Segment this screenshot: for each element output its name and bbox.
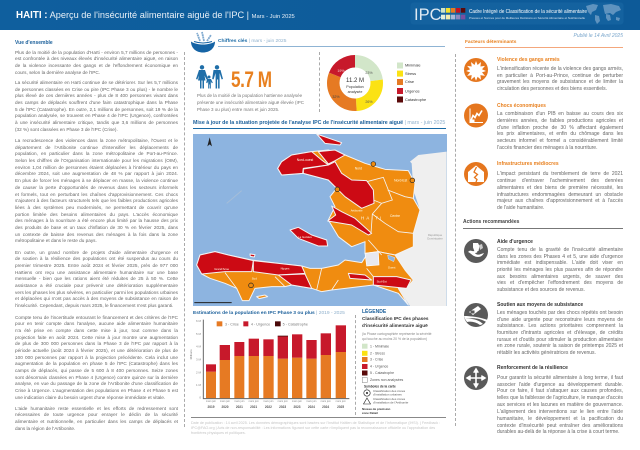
text: resilience: [497, 375, 623, 435]
text: resilience: humanitaire, le développement et la pacification du: [497, 416, 623, 422]
donut legend: Crise: [405, 79, 414, 84]
overview paragraph 3: environ 1,04 million de personnes étaient déplacées à l'intérieur du pays en: [15, 165, 178, 170]
region labels: HAITI: [361, 216, 384, 221]
legend note: qui touche au moins 20 % de la population): [362, 337, 427, 341]
overview paragraph 2: population analysée, se trouvent en Phase 4 de l'IPC (Urgence), confrontées: [15, 113, 178, 118]
bar chart: population in IPC Phase 3+: Millions: [189, 349, 193, 359]
bar chart: population in IPC Phase 3+: 0: [199, 396, 201, 400]
donut chart: population analysée: Population: [346, 85, 364, 89]
north arrow: [207, 137, 212, 146]
text: resilience: Pour ce faire, il faut s'attaquer aux causes profondes,: [497, 388, 623, 394]
overview paragraph 3: population, en particulier dans la zone métropolitaine de Port-au-Prince.: [15, 151, 178, 156]
heading: economic shocks: Chocs économiques: [497, 103, 546, 109]
overview paragraph 4: Haïtiens ont reçu une assistance alimentaire humanitaire sur une base: [15, 270, 178, 275]
overview paragraph 4: premier trimestre 2025. Entre août 2024 et février 2025, près de 977 000: [15, 263, 178, 268]
overview paragraph 5: pour en tenir compte dans l'analyse, aucune aide alimentaire humanitaire: [15, 321, 178, 326]
text: economic shocks: l'accès financier des ménages à la nourriture.: [497, 145, 597, 151]
donut chart: population analysée: 19%: [337, 69, 345, 73]
overview paragraph 2: [15, 80, 178, 132]
bar chart: population in IPC Phase 3+: 2020: [221, 405, 229, 409]
overview paragraph 6: nécessaires de toute urgence pour enrayer le déclin de la sécurité: [15, 412, 178, 417]
Port-au-Prince area: [365, 252, 379, 266]
overview paragraph 3: et formels, tout en perturbant les chaînes d'approvisionnement. Ces chocs: [15, 192, 178, 196]
title: HAITI : Aperçu de l'insécurité alimentaire aiguë de l'IPC | Mars - Juin 2025: [16, 10, 295, 21]
text: livelihood support: en zone rurale, soutenir la saison de printemps 2025 et: [497, 343, 623, 349]
overview paragraph 3: En plus de forcer les ménages à se déplacer en masse, la violence continue: [15, 178, 178, 183]
text: resilience: durables au-delà de la réponse à la crise à court terme.: [497, 429, 620, 435]
overview paragraph 6: alimentaire et nutritionnelle, en particulier dans les camps de déplacés et: [15, 419, 178, 424]
text: livelihood support: d'une aide urgente pour reconstruire leurs moyens de: [497, 317, 623, 323]
overview paragraph 5: 100 000 personnes par rapport à la projection précédente. Cela inclut une: [15, 355, 178, 360]
icon: family: [196, 65, 223, 88]
IPC logo: IPC: [414, 6, 442, 24]
bar chart: population in IPC Phase 3+: 2023: [293, 405, 301, 409]
legend swatches: d'installation de l'Artibonite: [373, 400, 409, 404]
bar chart: population in IPC Phase 3+: 5 M: [196, 332, 201, 336]
bar chart: population in IPC Phase 3+: 2021: [236, 405, 243, 409]
bar chart: population in IPC Phase 3+: mars juin: [220, 400, 231, 403]
text: violence: en particulier à Port-au-Prince, continue de perturber: [497, 73, 623, 79]
overview paragraph 3: Selon les chiffres de l'Organisation internationale pour les migrations (OIM),: [15, 158, 178, 163]
heading: resilience: Renforcement de la résilience: [497, 365, 568, 371]
overview paragraph 5: de plus de 300 000 personnes dans la Phase 3 de l'IPC par rapport à la: [15, 341, 178, 346]
heading: Vue d'ensemble: Vue d'ensemble: [15, 40, 53, 46]
heading: infrastructure: Infrastructures médiocres: [497, 161, 559, 167]
region labels: Sud: [252, 276, 257, 280]
legend note: (la Phase cartographiée représente la sévérité: [362, 332, 432, 336]
text: livelihood support: rétablir les activités génératrices de revenus.: [497, 350, 596, 356]
legend swatches: Symboles de la carte: [364, 384, 396, 388]
heading: chart title: Estimations de la population en IPC Phase 3 ou plus | 2019 - 2025: [193, 310, 345, 316]
overview paragraph 5: Compte tenu de l'incertitude entourant le financement et des critères de l'IPC: [15, 314, 178, 320]
overview paragraph 3: des produits de base et un taux d'inflation de 30 % en février 2025, dans: [15, 225, 178, 230]
chart legend: 3 - Crise: [225, 322, 239, 326]
overview paragraph 1: est confrontée à des niveaux élevés d'insécurité alimentaire aiguë, en raison: [15, 56, 178, 61]
donut legend: [397, 62, 426, 102]
bar chart: population in IPC Phase 3+: 2 M: [196, 370, 201, 374]
publication date: Publié le 14 Avril 2025: [574, 33, 623, 39]
overview paragraph 3: un contexte de baisse des revenus des ménages à la fois dans la zone: [15, 232, 178, 237]
legend swatches: 5 - Catastrophe: [370, 371, 394, 375]
chart legend: 5 - Catastrophe: [283, 322, 308, 326]
donut legend: Catastrophe: [405, 97, 426, 102]
icon: livelihood support: [464, 303, 488, 327]
donut chart: population analysée: [327, 55, 383, 111]
bar chart: population in IPC Phase 3+: 2022: [265, 405, 272, 409]
bar chart: population in IPC Phase 3+: 2023: [279, 405, 286, 409]
overview paragraph 3: liées à des systèmes peu modernisés, ne permettant de couvrir qu'une: [15, 205, 178, 210]
donut chart: population analysée: analysée: [348, 90, 362, 94]
overview paragraph 6: L'aide humanitaire reste essentielle et les efforts de redressement sont: [15, 406, 178, 410]
legend subtitle: [362, 316, 428, 328]
text: livelihood support: subsistance. Les actions prioritaires comprennent la: [497, 323, 623, 329]
bar chart: population in IPC Phase 3+: [189, 319, 350, 409]
heading: emergency aid: Aide d'urgence: [497, 239, 533, 245]
text: emergency aid: priorité les ménages les plus pauvres afin de répondre: [497, 267, 623, 273]
footnote: IPC@FAO.org | Avis de non-responsabilité : Les informations figurant sur cette carte n'impliquent pas la reconnaissance officielle ou l'approbation des: [191, 426, 435, 430]
overview paragraph 5: [15, 314, 178, 400]
text: infrastructure: majeur aux chaînes d'approvisionnement et à l'accès: [497, 198, 623, 204]
text: resilience: telles que la faiblesse de l'agriculture, le manque d'accès: [497, 395, 623, 401]
orange base land: [197, 150, 420, 305]
icon: wheat bowl: [191, 32, 215, 52]
text: emergency aid: dans les zones des Phases 4 et 5, une aide d'urgence: [497, 254, 623, 260]
overview paragraph 4: et déplacées qui n'ont pas accès à des moyens de subsistance en raison de: [15, 296, 178, 301]
overview paragraph 5: analyse, en vue du passage de la zone de l'Artibonite d'une classification de: [15, 381, 178, 386]
text: resilience: contexte d'insécurité peut entraîner des améliorations: [497, 423, 623, 429]
text: economic shocks: La combinaison d'un PIB en baisse au cours des six: [497, 111, 623, 117]
overview paragraph 2: (32 %) sont classées en Phase 3 de l'IPC (Crise).: [15, 127, 118, 132]
region labels: Nord-ouest: [297, 158, 313, 162]
overview paragraph 6: [15, 406, 178, 431]
overview paragraph 3: portion limitée des besoins alimentaires du pays. L'accès économique: [15, 212, 178, 217]
text: livelihood support: ruraux et d'outils pour stimuler la production alimentaire: [497, 337, 623, 343]
key figure: 5.7 M: 5.7 M: [231, 66, 272, 92]
icon: poor infrastructure: [464, 162, 488, 186]
region labels: Nord: [355, 166, 362, 170]
text: economic shocks: [497, 111, 623, 151]
overview paragraph 5: augmentation de la population en phase 5 de l'IPC (Catastrophe) dans les: [15, 361, 178, 366]
icon: resilience: [464, 366, 488, 390]
overview paragraph 1: Plus de la moitié de la population d'Haïti - environ 5,7 millions de personnes -: [15, 50, 178, 54]
region labels: Dominicaine: [427, 236, 443, 240]
footnote: Date de publication : 14 avril 2025. Les données démographiques sont basées sur l'Institut Haïtien de Statistique et de l'Informatique (IHSI). | Feedback :: [191, 420, 440, 424]
overview paragraph 1: de la violence incessante des gangs et de l'effondrement économique en: [15, 63, 178, 68]
text: violence: circulation des personnes et des biens essentiels.: [497, 86, 607, 92]
footnote: frontières physiques et politiques.: [191, 430, 246, 434]
overview paragraph 2: à une insécurité alimentaire critique, tandis que 3,6 millions de personnes: [15, 120, 178, 125]
overview paragraph 4: vers les phases les plus sévères, en particulier parmi les populations urbaines: [15, 290, 178, 295]
footnote: [191, 420, 440, 435]
key figure description: [197, 93, 304, 112]
bar chart: population in IPC Phase 3+: 2021: [250, 405, 257, 409]
text: emergency aid: immédiate est indispensable. L'aide doit viser en: [497, 260, 623, 266]
region labels: Nord-Est: [394, 179, 407, 183]
overview paragraph 3: département de l'Artibonite continue d'intensifier les déplacements de: [15, 145, 178, 150]
overview paragraph 5: projection faite en août 2024. Cette mise à jour montre une augmentation: [15, 335, 178, 340]
overview paragraph 4: mensuelle - bien que les rations aient été réduites de 25 à 50 %. Cette: [15, 276, 178, 281]
legend note: [362, 332, 432, 341]
markers: [249, 162, 415, 288]
icon: gang violence: [464, 58, 488, 82]
bar chart: population in IPC Phase 3+: mars juin: [263, 400, 274, 403]
overview paragraph 2: 5 de l'IPC (Catastrophe). En outre, 2,1 millions de personnes, soit 19 % de la: [15, 107, 178, 112]
text: resilience: associer l'aide d'urgence au développement durable.: [497, 382, 623, 388]
overview paragraph 4: l'insécurité. Cependant, depuis mars 2025, le financement n'est plus garanti.: [15, 303, 173, 308]
bar chart: population in IPC Phase 3+: mars juin: [234, 400, 245, 403]
text: economic shocks: secteurs informel et formel a considérablement limité: [497, 138, 623, 144]
legend swatches: zone Détail: [362, 411, 378, 415]
bar chart: population in IPC Phase 3+: 4 M: [196, 345, 201, 349]
legend subtitle: Classification IPC des phases: [362, 316, 428, 321]
legend swatches: 2 - Stress: [370, 352, 385, 356]
overview paragraph 3: de causer la perte d'opportunités de revenus dans les secteurs informels: [15, 185, 178, 190]
red regions: [197, 134, 411, 288]
donut chart: population analysée: 26%: [365, 100, 373, 104]
scale bar: [194, 301, 232, 304]
legend swatches: Classification des zones: [373, 389, 406, 393]
text: economic shocks: les prix alimentaires, et enfin du chômage dans les: [497, 131, 623, 137]
text: emergency aid: vies et d'empêcher l'effondrement des moyens de: [497, 280, 623, 286]
overview paragraph 2: de personnes classées en Crise ou pire (IPC Phase 3 ou plus) - le nombre le: [15, 87, 178, 92]
IPC logo: Preuves et Normes pour de Meilleures Décisions en Sécurité Alimentaire et Nutritionnelle: [469, 16, 585, 20]
donut chart: population analysée: 11.2 M: [346, 78, 364, 84]
text: infrastructure: L'impact persistant du tremblement de terre de 2021: [497, 171, 623, 177]
chart legend: [217, 321, 308, 326]
heading: Facteurs déterminants: Facteurs déterminants: [465, 40, 516, 44]
overview paragraph 3: La recrudescence des violences dans la zone métropolitaine, l'Ouest et le: [15, 138, 178, 143]
donut chart: population analysée: 23%: [365, 71, 373, 75]
overview paragraph 3: s'ajoutent à des facteurs structurels tels que les faibles productions agricoles: [15, 198, 178, 203]
map: Haiti IPC phases: [193, 134, 447, 306]
donut chart: population analysée: 32%: [332, 95, 340, 99]
text: livelihood support: [497, 310, 623, 356]
bar chart: population in IPC Phase 3+: mars juin: [336, 400, 346, 403]
legend swatches: 4 - Urgence: [370, 364, 388, 368]
bar chart: population in IPC Phase 3+: 2019: [207, 405, 215, 409]
overview paragraph 3: décembre 2024, soit une augmentation de 48 % par rapport à juin 2024.: [15, 171, 178, 176]
bar chart: population in IPC Phase 3+: 2024: [308, 405, 315, 409]
overview paragraph 5: sont désormais classées en Phase 4 (Urgence) contre quinze sur la dernière: [15, 375, 178, 380]
legend heading: LÉGENDE: [362, 309, 386, 315]
overview paragraph 1: [15, 50, 178, 75]
region labels: République: [428, 233, 443, 237]
icon: economic shocks: [464, 104, 488, 128]
heading: violence: Violence des gangs armés: [497, 57, 560, 63]
text: infrastructure: infrastructures endommagées demeurant un obstacle: [497, 192, 623, 198]
legend swatches: Niveau de précision: [362, 407, 391, 411]
legend swatches: 1 - Minimale: [370, 344, 389, 348]
text: livelihood support: fourniture d'intrants agricoles et d'élevage, de crédits: [497, 330, 623, 336]
overview paragraph 4: assistance a été cruciale pour prévenir une détérioration supplémentaire: [15, 283, 178, 288]
bar chart: population in IPC Phase 3+: mars juin: [249, 400, 259, 403]
region labels: Grand'Anse: [214, 267, 230, 271]
overview paragraph 4: En outre, un grand nombre de projets d'aide alimentaire d'urgence et: [15, 250, 178, 254]
heading: Chiffres clés: Chiffres clés | mars - juin 2025: [218, 39, 286, 44]
region labels: La Gonâve: [298, 235, 312, 239]
text: resilience: L'alignement des interventions sur le lien entre l'aide: [497, 409, 623, 415]
Dominican Republic: [395, 152, 447, 306]
internal region borders: [225, 177, 413, 290]
bar chart: population in IPC Phase 3+: mars juin: [321, 400, 331, 403]
legend swatches: 3 - Crise: [370, 358, 383, 362]
legend swatches: [362, 344, 409, 415]
map legend: [362, 308, 432, 415]
overview paragraph 5: période actuelle (août 2024 à février 2025), et une détérioration de plus de: [15, 348, 178, 353]
text: resilience: Pour garantir la sécurité alimentaire à long terme, il faut: [497, 375, 623, 381]
overview paragraph 3: [15, 138, 178, 243]
overview paragraph 5: une indication claire du besoin urgent d'une réponse immédiate et vitale.: [15, 395, 165, 400]
IPC logo: Cadre Intégré de Classification de la sécurité alimentaire: [469, 9, 587, 15]
region labels: Ouest: [388, 265, 396, 269]
donut legend: Stress: [405, 71, 416, 76]
bar chart: population in IPC Phase 3+: 1 M: [196, 383, 201, 387]
donut legend: Urgence: [405, 88, 420, 94]
bar chart: population in IPC Phase 3+: mars juin: [306, 400, 317, 403]
heading: map title: Mise à jour de la situation projetée de l'analyse IPC de l'insécurité alimentaire aiguë | mars - juin 2025: [193, 120, 445, 126]
text: violence: L'intensification récente de la violence des gangs armés,: [497, 66, 623, 72]
text: emergency aid: aux besoins alimentaires urgents, de sauver des: [497, 274, 623, 280]
text: infrastructure: continue d'entraver l'acheminement des denrées: [497, 178, 623, 184]
overview paragraph 6: dans la région de l'Artibonite.: [15, 426, 75, 431]
overview paragraph 4: de soutien à la résilience des populations ont été suspendus au cours du: [15, 256, 178, 261]
bar chart: population in IPC Phase 3+: mars juin: [278, 400, 288, 403]
region labels: Centre: [390, 214, 400, 218]
region labels: [214, 158, 443, 284]
text: economic shocks: dernières années, de faibles productions agricoles et: [497, 118, 623, 124]
icon: emergency aid: [464, 239, 488, 263]
IPC logo: [414, 4, 621, 24]
text: emergency aid: [497, 247, 623, 293]
text: violence: gravement les moyens de subsistance et de limiter la: [497, 79, 623, 85]
legend swatches: Zones non analysées: [370, 378, 404, 382]
bar chart: population in IPC Phase 3+: mars juin: [206, 400, 217, 403]
chart legend: 4 - Urgence: [251, 322, 270, 326]
region labels: Nippes: [281, 266, 290, 270]
text: infrastructure: de l'aide humanitaire.: [497, 205, 544, 211]
key figure description: Plus de la moitié de la population haïtienne analysée: [197, 93, 302, 98]
overview paragraph 2: des camps de déplacés souffrent d'une faim catastrophique dans la Phase: [15, 100, 178, 105]
text: resilience: aux services et les lacunes en matière de gouvernance.: [497, 402, 623, 408]
donut legend: Minimale: [405, 62, 421, 68]
bar chart: population in IPC Phase 3+: 2025: [337, 405, 344, 409]
text: economic shocks: d'une inflation proche de 30 % affectant également: [497, 125, 623, 131]
legend swatches: Classification des zones: [373, 397, 406, 401]
text: emergency aid: Compte tenu de la gravité de l'insécurité alimentaire: [497, 247, 623, 253]
bar chart: population in IPC Phase 3+: 6 M: [196, 319, 201, 323]
heading: livelihood support: Soutien aux moyens de subsistance: [497, 302, 583, 308]
text: infrastructure: alimentaires et des biens de première nécessité, les: [497, 185, 623, 191]
text: emergency aid: subsistance et des sources de revenus.: [497, 287, 585, 293]
overview paragraph 5: Crise à Urgence. L'augmentation des populations en Phase 4 et Phase 5 est: [15, 388, 178, 393]
key figure description: Phase 3 ou plus) entre mars et juin 2025.: [197, 107, 279, 112]
legend subtitle: d'insécurité alimentaire aiguë: [362, 323, 428, 328]
region labels: Sud-Est: [377, 280, 387, 284]
overview paragraph 2: plus élevé de ces dernières années - plus de 8 400 personnes vivant dans: [15, 93, 178, 98]
text: violence: [497, 66, 623, 92]
text: livelihood support: Les ménages touchés par des chocs répétés ont besoin: [497, 310, 623, 316]
key figure description: présente une insécurité alimentaire aiguë élevée (IPC: [197, 100, 304, 105]
text: infrastructure: [497, 171, 623, 211]
overview paragraph 1: cours, selon la dernière analyse de l'IPC.: [15, 70, 100, 75]
overview paragraph 5: n'a été prise en compte dans cette mise à jour, tout comme dans la: [15, 328, 178, 333]
overview paragraph 2: La sécurité alimentaire en Haïti continue de se détériorer. Sur les 5,7 millions: [15, 80, 178, 85]
bar chart: population in IPC Phase 3+: 3 M: [196, 358, 201, 362]
bar chart: population in IPC Phase 3+: mars juin: [292, 400, 303, 403]
region labels: Artibonite: [351, 209, 363, 213]
overview paragraph 4: [15, 250, 178, 308]
overview paragraph 5: camps de déplacés, qui passe de 5 600 à 8 400 personnes. Seize zones: [15, 368, 178, 373]
overview paragraph 3: des ménages à la nourriture a été encore plus limité par la hausse des prix: [15, 218, 178, 223]
legend swatches: d'installation urbaines: [373, 392, 402, 396]
overview paragraph 3: métropolitaine et dans le reste du pays.: [15, 238, 97, 243]
header banner: [0, 0, 640, 30]
bar chart: population in IPC Phase 3+: 2024: [322, 405, 329, 409]
heading: Actions recommandées: Actions recommandées: [463, 219, 519, 225]
